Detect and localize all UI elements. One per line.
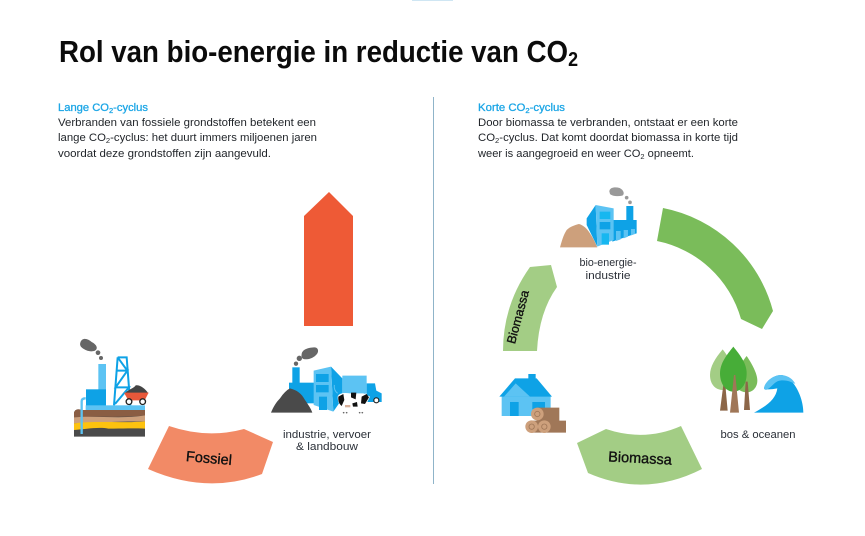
arrow: rode pijl omhoog [304, 192, 353, 326]
text block: korte cyclus: CO [478, 132, 495, 144]
arrow: biomassa links [503, 265, 557, 351]
arrow: biomassa links: Biomassa [504, 289, 532, 345]
icon: fossiele winning [74, 339, 149, 437]
icon: huis en houtstapel [499, 374, 566, 433]
panel: korte cyclus tekst [477, 102, 738, 161]
heading: korte cyclus: -cyclus [530, 102, 565, 114]
label: industrie, vervoer en landbouw: industrie, vervoer [283, 429, 371, 441]
label: industrie, vervoer en landbouw [283, 429, 371, 453]
text block: korte cyclus: 2 [495, 136, 499, 145]
arrow: biomassa onder: Biomassa [608, 449, 673, 469]
icon: bos en oceanen [710, 347, 803, 413]
title: 2 [568, 49, 578, 71]
heading: korte cyclus: 2 [525, 106, 530, 115]
text block: korte cyclus: opneemt. [645, 148, 694, 160]
label: industrie, vervoer en landbouw: & landbouw [296, 441, 359, 453]
label: bio-energie-industrie: bio-energie- [580, 257, 637, 269]
arrow: fossiel [148, 426, 273, 483]
heading: lange cyclus: 2 [109, 106, 113, 115]
text block: korte cyclus: weer is aangegroeid en weer CO [478, 148, 642, 160]
panel: lange cyclus tekst [58, 102, 317, 160]
text block: lange cyclus: voordat deze grondstoffen zijn aangevuld. [58, 148, 271, 160]
heading: lange cyclus: Lange CO [58, 102, 109, 114]
arrow: donkergroen kringloop [657, 208, 773, 329]
heading: korte cyclus: Korte CO [478, 102, 525, 114]
text block: korte cyclus: -cyclus. Dat komt doordat biomassa in korte tijd [499, 132, 738, 144]
label: bio-energie-industrie: industrie [586, 270, 630, 282]
text block: lange cyclus: -cyclus: het duurt immers miljoenen jaren [110, 132, 317, 144]
icon: bio-energie-industrie [560, 187, 637, 247]
arrow: fossiel: Fossiel [185, 449, 232, 469]
text block: lange cyclus [58, 117, 317, 160]
text block: lange cyclus: Verbranden van fossiele grondstoffen betekent een [58, 117, 316, 129]
text block: korte cyclus: 2 [640, 152, 645, 161]
icon: industrie, vervoer en landbouw [271, 347, 382, 413]
label: bos en oceanen: bos & oceanen [720, 429, 796, 441]
text block: lange cyclus: 2 [106, 136, 110, 145]
arrow: biomassa onder [577, 426, 702, 485]
text block: korte cyclus [477, 117, 738, 161]
label: bio-energie-industrie [580, 257, 637, 282]
heading: lange cyclus: -cyclus [113, 102, 148, 114]
text block: korte cyclus: Door biomassa te verbranden, ontstaat er een korte [478, 117, 738, 129]
title: Rol van bio-energie in reductie van CO [59, 34, 629, 69]
text block: lange cyclus: lange CO [58, 132, 105, 144]
